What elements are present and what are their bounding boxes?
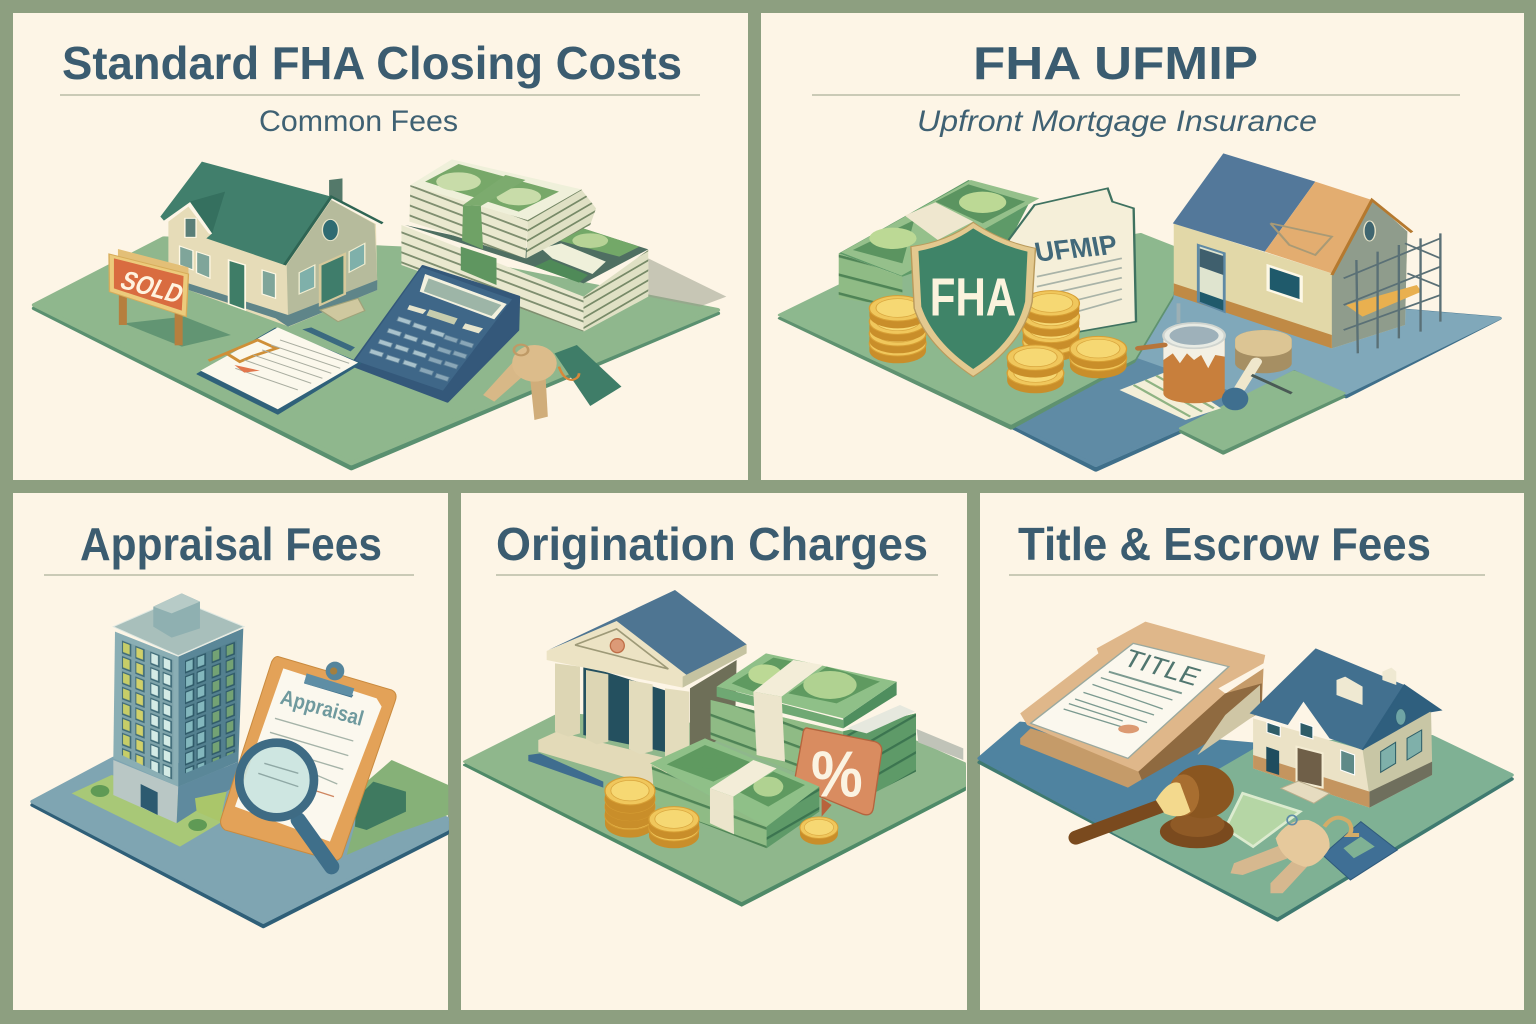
icon: gavel bbox=[1076, 765, 1234, 848]
panel background bbox=[13, 13, 748, 480]
icon: office building bbox=[113, 593, 244, 823]
icon: bill under gavel bbox=[1225, 793, 1300, 847]
icon: clipboard bbox=[197, 327, 360, 414]
icon: money stacks bbox=[401, 159, 648, 332]
illustration: bank, cash and percent tag bbox=[464, 590, 965, 906]
panel: Title & Escrow Fees bbox=[979, 493, 1524, 1010]
heading: Title & Escrow Fees: Title & Escrow Fees bbox=[1018, 518, 1431, 570]
ground plate bbox=[34, 238, 726, 468]
icon: money stack bbox=[839, 180, 1039, 307]
icon: keys bbox=[483, 345, 621, 420]
icon: bank building bbox=[528, 590, 747, 788]
panel background bbox=[461, 493, 967, 1010]
icon: calculator bbox=[355, 266, 519, 402]
panel background bbox=[13, 493, 448, 1010]
icon: sold sign bbox=[109, 249, 189, 345]
icon: appraisal clipboard: Appraisal bbox=[278, 685, 366, 731]
icon: money stack bbox=[355, 782, 406, 830]
icon: FHA shield: FHA bbox=[930, 268, 1016, 327]
icon: title folder bbox=[1020, 622, 1265, 788]
icon: percent tag bbox=[795, 728, 882, 817]
icon: house bbox=[1250, 648, 1441, 808]
subheading: Common Fees: Common Fees bbox=[259, 105, 458, 138]
icon: UFMIP document bbox=[1009, 188, 1136, 335]
panel background bbox=[980, 493, 1524, 1010]
icon: sold sign: SOLD bbox=[116, 265, 189, 309]
icon: front money stack bbox=[650, 738, 819, 848]
illustration: title folder, house, gavel and keys bbox=[979, 622, 1512, 920]
icon: UFMIP document: UFMIP bbox=[1032, 230, 1120, 268]
panel background bbox=[761, 13, 1524, 480]
ground plate bbox=[979, 723, 1512, 920]
heading: Appraisal Fees: Appraisal Fees bbox=[80, 518, 382, 570]
panel: Origination Charges bbox=[461, 493, 967, 1010]
panel: FHA UFMIP bbox=[761, 13, 1524, 480]
ground plate bbox=[780, 234, 1499, 470]
illustration: house, money, calculator and keys bbox=[34, 159, 726, 468]
illustration: shield, coins, document and renovated house bbox=[780, 153, 1499, 470]
icon: house bbox=[160, 162, 383, 327]
icon: paint can and tools bbox=[1119, 303, 1292, 420]
panel: Standard FHA Closing Costs bbox=[13, 13, 748, 480]
ground plate bbox=[32, 758, 448, 927]
heading: Origination Charges: Origination Charges bbox=[496, 518, 928, 570]
heading: Standard FHA Closing Costs: Standard FHA Closing Costs bbox=[62, 37, 682, 89]
illustration: office building and appraisal clipboard bbox=[32, 593, 448, 927]
icon: percent tag: % bbox=[811, 738, 863, 811]
ground plate bbox=[464, 713, 965, 906]
icon: coin stacks bbox=[869, 291, 1127, 393]
icon: FHA shield bbox=[911, 222, 1035, 377]
icon: shrubs bbox=[91, 785, 207, 831]
icon: gold coins bbox=[605, 777, 838, 848]
panel: Appraisal Fees bbox=[13, 493, 448, 1010]
subheading: Upfront Mortgage Insurance: Upfront Mortgage Insurance bbox=[917, 105, 1317, 138]
icon: keys and tag bbox=[1230, 815, 1397, 893]
icon: title folder: TITLE bbox=[1121, 644, 1203, 692]
icon: appraisal clipboard bbox=[221, 657, 396, 867]
icon: large money stack bbox=[711, 653, 916, 792]
heading: FHA UFMIP: FHA UFMIP bbox=[973, 37, 1258, 89]
icon: house under renovation bbox=[1173, 153, 1440, 353]
